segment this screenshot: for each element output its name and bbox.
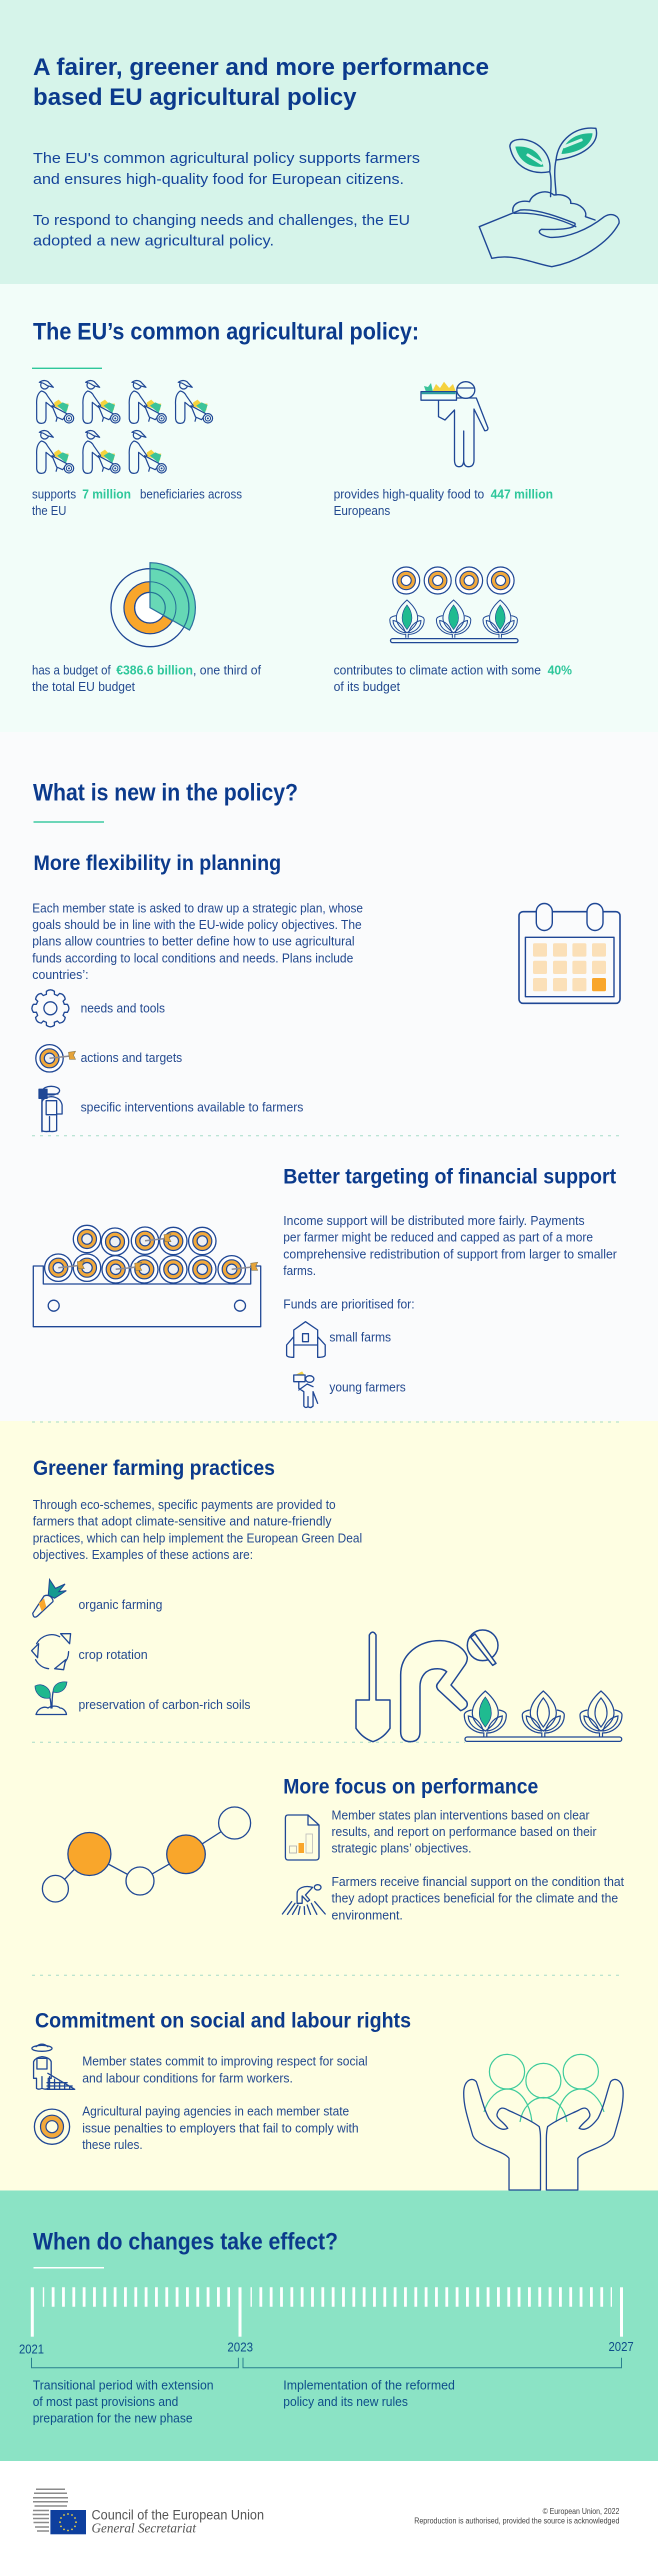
text: eco-schemes: practices, which can help implement the European Green Deal [33, 1530, 362, 1545]
icon: sprout in soil [35, 1682, 67, 1714]
text: financial support condition [332, 1874, 624, 1922]
intro text: The EU's common agricultural policy supports farmers [33, 151, 420, 167]
timeline: 2021 [19, 2341, 44, 2356]
text: penalties [82, 2104, 359, 2152]
text: implementation [283, 2377, 455, 2409]
text: 447 million Europeans: Europeans [334, 503, 391, 518]
icon: young farmer [294, 1371, 318, 1408]
label: preservation: preservation of carbon-rich soils [78, 1697, 251, 1712]
timeline: 2023 [227, 2340, 253, 2355]
text: budget: €386.6 billion [116, 662, 193, 677]
text: income support: farms. [283, 1263, 316, 1278]
icon: crate of targets [33, 1225, 261, 1327]
text: climate action: of its budget [334, 679, 400, 694]
text: strategic plan: plans allow countries to better define how to use agricultural [32, 934, 355, 949]
subheading: social and labour rights: Commitment on social and labour rights [35, 2010, 411, 2033]
text: strategic plan: Each member state is asked to draw up a strategic plan, whose [32, 900, 363, 915]
text: member states plan: strategic plans’ objectives. [332, 1841, 472, 1856]
logo: Council of the EU [33, 2489, 264, 2536]
text: transitional period: of most past provisions and [33, 2394, 178, 2409]
text: member states plan: Member states plan interventions based on clear [332, 1807, 590, 1822]
icon: farm worker [32, 2044, 75, 2089]
icon: small farm [287, 1322, 325, 1357]
text: strategic plan [32, 900, 363, 982]
icon: farmer bending with shovel and plants [356, 1630, 622, 1742]
label: organic farming: organic farming [78, 1597, 162, 1612]
text: strategic plan: countries’: [32, 967, 88, 982]
icon: farmer [39, 1086, 62, 1132]
text: penalties: these rules. [82, 2137, 143, 2152]
text: income support: per farmer might be reduced and capped as part of a more [283, 1230, 593, 1245]
title: A fairer, greener and more performance [33, 54, 489, 81]
text: financial support condition: environment. [332, 1907, 403, 1922]
text: social and labour conditions: Member states commit to improving respect for social [82, 2054, 368, 2069]
label: small farms: small farms [329, 1330, 392, 1345]
label: specific interventions: specific interventions available to farmers [81, 1100, 304, 1115]
text: eco-schemes: objectives. Examples of these actions are: [33, 1547, 253, 1562]
text: transitional period [33, 2377, 214, 2426]
intro text [33, 151, 420, 249]
text: implementation: policy and its new rules [283, 2394, 408, 2409]
icon: target [34, 2109, 70, 2144]
text: strategic plan: funds according to local conditions and needs. Plans include [32, 950, 353, 965]
title [33, 54, 489, 111]
text: social and labour conditions [82, 2054, 368, 2085]
credits [414, 2507, 620, 2525]
text: strategic plan: goals should be in line with the EU-wide policy objectives. The [32, 917, 362, 932]
text: financial support condition: Farmers receive financial support on the condition that [332, 1874, 624, 1889]
text: social and labour conditions: and labour conditions for farm workers. [82, 2070, 293, 2085]
chart: budget share donut [111, 563, 195, 647]
intro text: and ensures high-quality food for European citizens. [33, 172, 404, 188]
icon: gear [32, 990, 69, 1027]
credits: Reproduction is authorised, provided the source is acknowledged [414, 2516, 619, 2525]
icon: seedling in hand [479, 128, 619, 267]
intro text: adopted a new agricultural policy. [33, 233, 274, 249]
subheading: greener farming: Greener farming practices [33, 1457, 275, 1480]
text: climate action: contributes to climate action with some [334, 662, 544, 677]
text: budget: , one third of [193, 662, 261, 677]
text: member states plan [332, 1807, 597, 1856]
text: budget [32, 662, 261, 694]
timeline: 2027 [608, 2339, 634, 2354]
title: based EU agricultural policy [33, 84, 357, 111]
heading: what is new: What is new in the policy? [33, 780, 298, 807]
text: eco-schemes: Through eco-schemes, specific payments are provided to [33, 1497, 336, 1512]
text: financial support condition: they adopt practices beneficial for the climate and the [332, 1891, 618, 1906]
logo: Council of the EU: Council of the European Union [92, 2507, 264, 2522]
label: actions and targets: actions and targets [81, 1050, 183, 1065]
icon: carrot [33, 1579, 66, 1617]
text: income support [283, 1213, 618, 1311]
text: 7 million beneficiaries: the EU [32, 503, 66, 518]
text: 7 million beneficiaries: beneficiaries across [137, 486, 242, 501]
text: income support: Income support will be distributed more fairly. Payments [283, 1213, 585, 1228]
icon: report document [285, 1815, 319, 1860]
intro text: To respond to changing needs and challenges, the EU [33, 213, 410, 229]
text: budget: has a budget of [32, 662, 114, 677]
text: 7 million beneficiaries: 7 million [82, 486, 131, 501]
logo: Council of the EU: General Secretariat [92, 2521, 197, 2536]
icon: targets and plants [390, 567, 518, 643]
text: budget: the total EU budget [32, 679, 135, 694]
label: crop rotation: crop rotation [78, 1647, 148, 1662]
label: needs and tools: needs and tools [81, 1000, 165, 1015]
icon: man carrying food tray [421, 382, 488, 467]
text: penalties: Agricultural paying agencies in each member state [82, 2104, 349, 2119]
credits: © European Union, 2022 [543, 2507, 620, 2516]
text: 447 million Europeans: 447 million [491, 486, 553, 501]
label: young farmers: young farmers [329, 1380, 406, 1395]
icon: crop rotation [32, 1634, 71, 1670]
text: transitional period: Transitional period with extension [33, 2377, 214, 2392]
text: 447 million Europeans [334, 486, 553, 518]
heading: when do changes take effect: When do changes take effect? [33, 2228, 338, 2255]
icon: target with dart [36, 1045, 76, 1072]
text: 7 million beneficiaries [32, 486, 242, 518]
text: income support: comprehensive redistribution of support from larger to smaller [283, 1246, 618, 1261]
text: penalties: issue penalties to employers that fail to comply with [82, 2120, 359, 2135]
subheading: focus on performance: More focus on performance [283, 1775, 538, 1798]
heading: common agricultural policy: The EU’s common agricultural policy: [33, 318, 419, 345]
icon: hands holding people [464, 2054, 623, 2190]
text: 447 million Europeans: provides high-quality food to [334, 486, 488, 501]
icon: seven farmers with wheelbarrows [37, 380, 213, 473]
icon: calendar [519, 904, 620, 1003]
subheading: better targeting: Better targeting of financial support [283, 1165, 616, 1188]
text: member states plan: results, and report on performance based on their [332, 1824, 597, 1839]
text: implementation: Implementation of the reformed [283, 2377, 455, 2392]
text: eco-schemes [33, 1497, 362, 1562]
text: climate action [334, 662, 572, 694]
icon: farmer in field [282, 1885, 325, 1914]
subheading: more flexibility: More flexibility in planning [34, 852, 281, 875]
text: eco-schemes: farmers that adopt climate-sensitive and nature-friendly [33, 1514, 332, 1529]
text: 7 million beneficiaries: supports [32, 486, 79, 501]
text: income support: Funds are prioritised for: [283, 1296, 415, 1311]
text: climate action: 40% [548, 662, 572, 677]
chart: performance nodes [42, 1807, 251, 1902]
text: transitional period: preparation for the new phase [33, 2411, 193, 2426]
timeline [19, 2287, 634, 2368]
